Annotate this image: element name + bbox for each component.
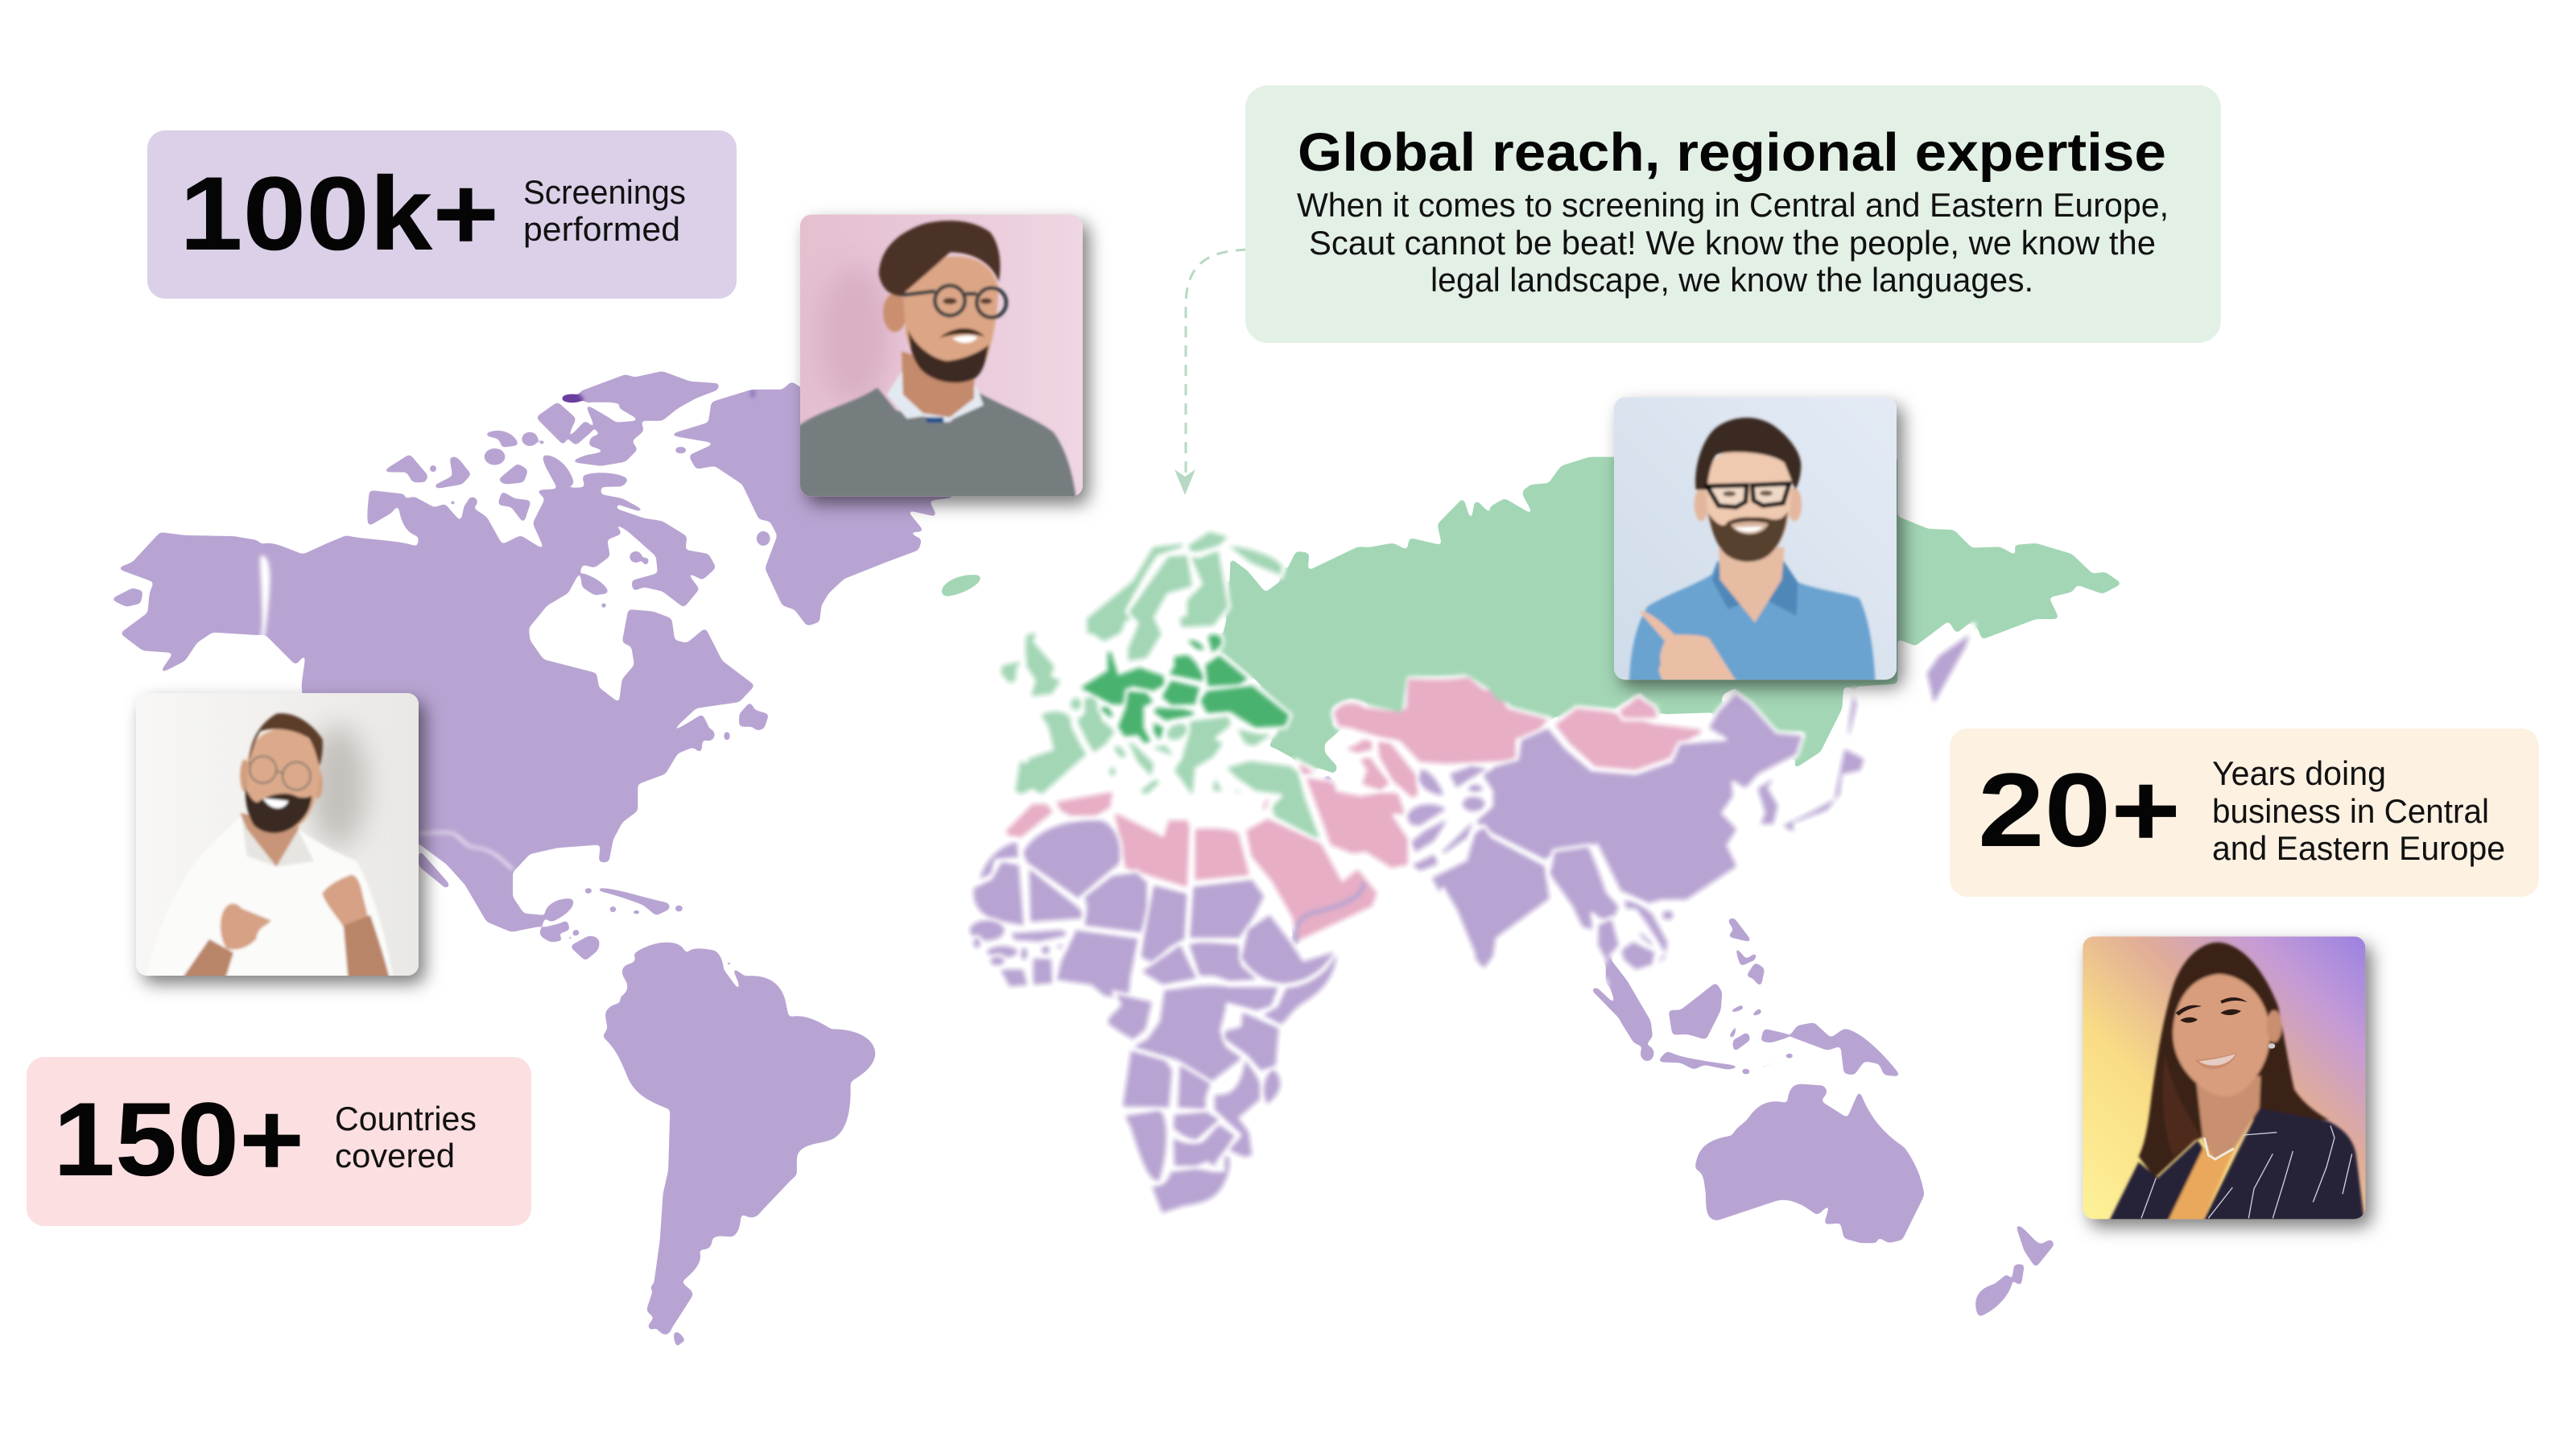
stat card: 100k+ screenings	[147, 130, 737, 299]
stat card: 150+ countries	[27, 1057, 531, 1226]
world map	[111, 371, 2122, 1349]
map region: northern Africa	[968, 819, 1265, 1001]
photo: smiling woman on gradient background	[2083, 936, 2365, 1229]
callout: global reach: Global reach, regional expertise	[1298, 122, 2166, 183]
pink countries: Central Asia, Middle East, North Africa	[1004, 675, 1550, 943]
stat card: 150+ countries: 150+	[53, 1080, 304, 1198]
stat card: 20+ years	[1950, 729, 2539, 897]
photo: laughing man in white shirt pointing	[136, 693, 419, 988]
map region: southern Africa	[1107, 913, 1339, 1215]
map region: Europe and western Russia	[942, 483, 1690, 1001]
photo: man with round glasses on pink background	[795, 215, 1083, 507]
map region: South-East Asia and Oceania	[1591, 918, 2054, 1317]
stat card: 150+ countries: covered	[335, 1137, 455, 1174]
stat card: 100k+ screenings: Screenings	[523, 173, 686, 211]
callout: global reach: legal landscape, we know the languages.	[1430, 261, 2033, 299]
stat card: 100k+ screenings: 100k+	[180, 155, 499, 272]
map region: eastern Russia and Asia	[1368, 457, 2122, 1006]
stat card: 20+ years: and Eastern Europe	[2212, 829, 2505, 867]
callout: global reach	[1245, 85, 2221, 343]
stat card: 20+ years: 20+	[1978, 751, 2181, 869]
stat card: 150+ countries: Countries	[335, 1100, 477, 1137]
stat card: 20+ years: Years doing	[2212, 754, 2386, 792]
highlighted countries: Central and Eastern Europe	[1078, 634, 1291, 745]
photo: man with black glasses pointing	[1614, 397, 1897, 690]
map region: South America	[602, 943, 875, 1349]
callout: global reach: When it comes to screening in Central and Eastern Europe,	[1297, 186, 2169, 224]
callout: global reach: Scaut cannot be beat! We know the people, we know the	[1309, 224, 2156, 262]
map region: North America	[111, 371, 952, 960]
stat card: 20+ years: business in Central	[2212, 792, 2489, 830]
stat card: 100k+ screenings: performed	[523, 210, 680, 248]
dashed arrow from callout to Europe	[1174, 250, 1247, 495]
